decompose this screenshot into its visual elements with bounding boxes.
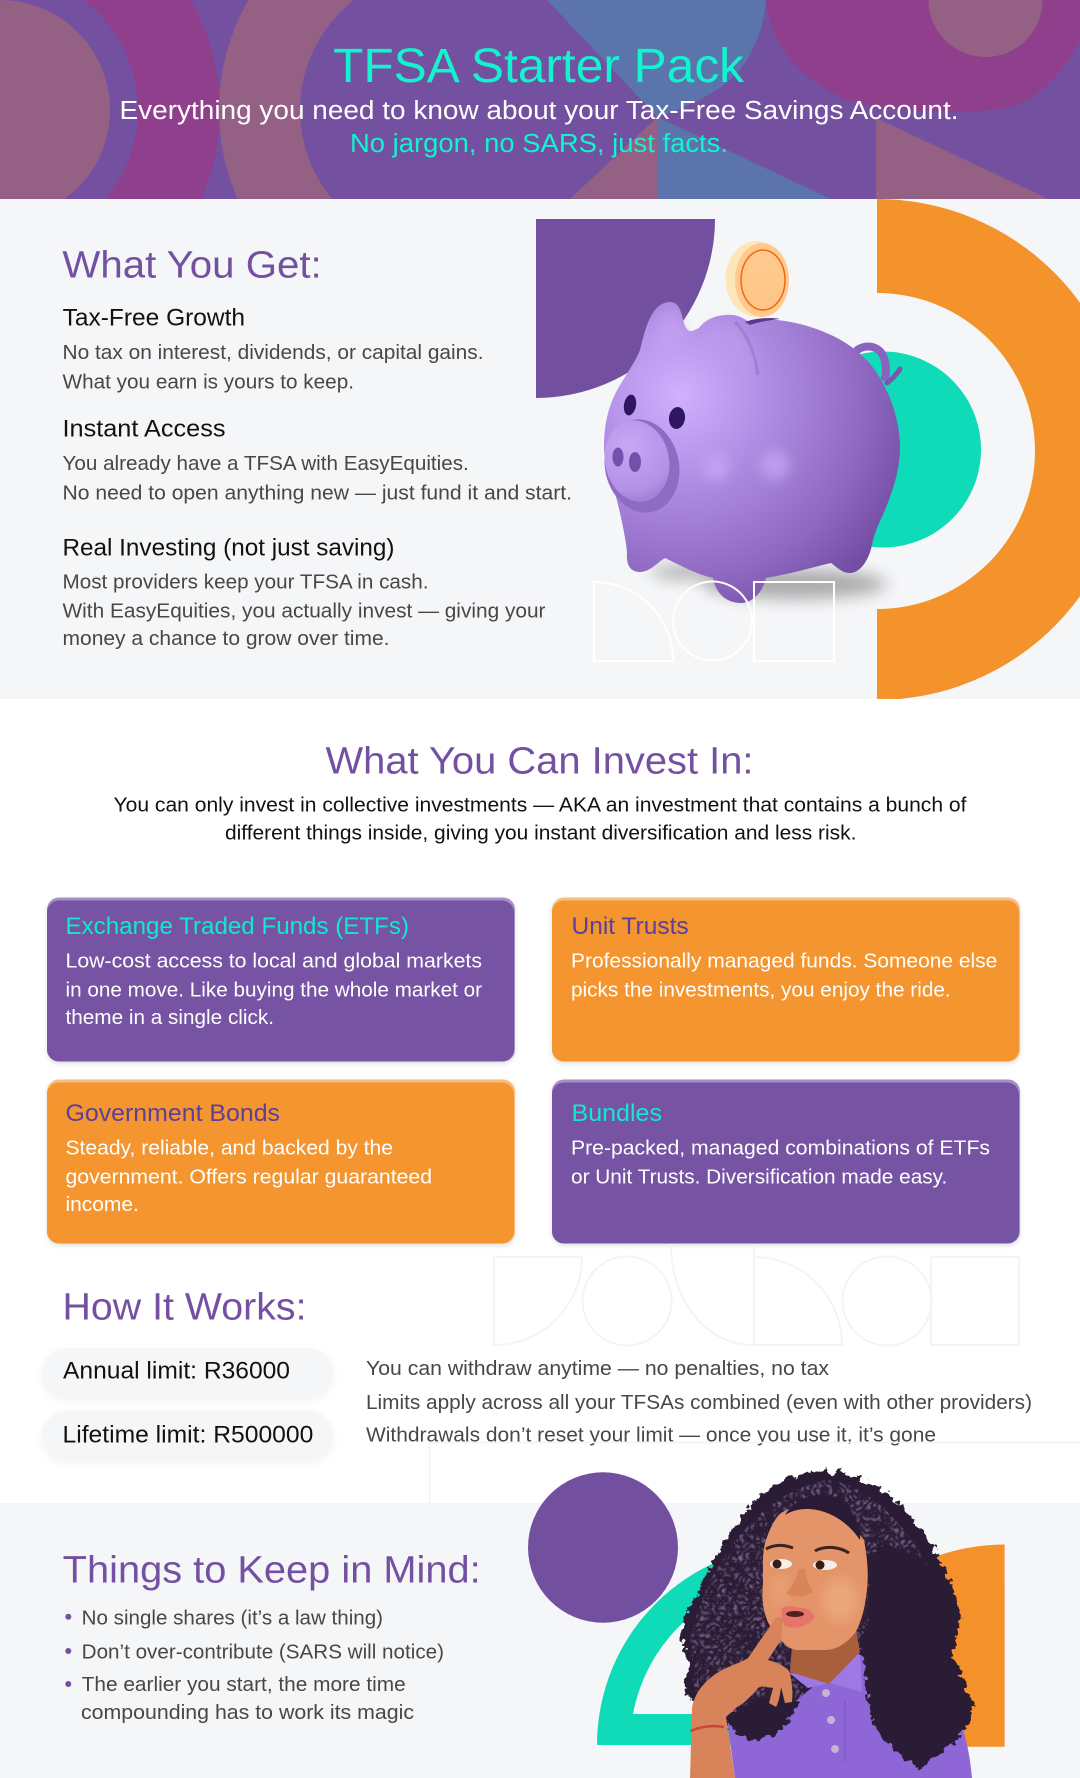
intro text: different things inside, giving you instant diversification and less risk. — [225, 821, 856, 844]
shirt — [726, 1648, 972, 1778]
pill: lifetime limit — [42, 1411, 333, 1460]
card: government bonds: Government Bonds — [66, 1100, 280, 1127]
decorative orange half ring — [877, 199, 1080, 700]
card: unit trusts: Professionally managed funds. Someone else — [571, 949, 997, 972]
benefit: real investing: With EasyEquities, you actually invest — giving your — [62, 599, 546, 622]
arm and hand — [690, 1617, 792, 1778]
illustration: thinking woman — [681, 1472, 973, 1778]
card: unit trusts: picks the investments, you enjoy the ride. — [571, 979, 951, 1002]
benefit: tax-free growth — [62, 305, 484, 393]
pill: lifetime limit: Lifetime limit: R500000 — [62, 1421, 313, 1448]
bullet list: compounding has to work its magic — [81, 1701, 414, 1724]
rules list: Limits apply across all your TFSAs combined (even with other providers) — [366, 1391, 1032, 1414]
card: exchange traded funds: theme in a single click. — [66, 1006, 274, 1029]
pill: annual limit: Annual limit: R36000 — [63, 1357, 290, 1384]
heading: How It Works: — [62, 1286, 306, 1328]
card: government bonds: Steady, reliable, and backed by the — [66, 1136, 393, 1159]
benefit: instant access — [62, 416, 572, 504]
card: government bonds: government. Offers regular guaranteed — [66, 1165, 432, 1188]
decorative quarter circle — [536, 219, 715, 398]
hair back — [681, 1472, 973, 1753]
benefit: real investing: money a chance to grow over time. — [62, 627, 390, 650]
intro text — [114, 794, 967, 844]
bullet list: The earlier you start, the more time — [82, 1673, 406, 1696]
benefit: tax-free growth: No tax on interest, dividends, or capital gains. — [62, 341, 484, 364]
card: bundles: Bundles — [572, 1100, 662, 1127]
card: unit trusts: Unit Trusts — [572, 913, 689, 940]
title: TFSA Starter Pack — [333, 40, 745, 93]
card: bundles — [552, 1080, 1020, 1244]
bullet list: No single shares (it’s a law thing) — [82, 1606, 383, 1629]
panel: header banner — [0, 0, 1080, 199]
rules list: Withdrawals don’t reset your limit — once you use it, it’s gone — [366, 1424, 936, 1447]
decorative orange quarter circle — [802, 1544, 1005, 1747]
card: exchange traded funds: Low-cost access to local and global markets — [66, 949, 482, 972]
card: government bonds — [47, 1080, 515, 1244]
card: government bonds: income. — [66, 1193, 139, 1216]
bullet list — [65, 1606, 444, 1724]
neck — [790, 1625, 860, 1684]
benefit: real investing: Most providers keep your TFSA in cash. — [62, 570, 429, 593]
benefit: real investing — [62, 535, 546, 650]
intro text: You can only invest in collective investments — AKA an investment that contains a bunch of — [114, 794, 967, 817]
heading: What You Can Invest In: — [326, 740, 754, 782]
face — [762, 1505, 868, 1650]
heading: What You Get: — [62, 244, 322, 286]
decorative faint outlined shapes — [494, 1244, 1019, 1346]
icon: piggy bank with coin — [596, 241, 900, 603]
pill: annual limit — [42, 1348, 333, 1397]
card: exchange traded funds: Exchange Traded Funds (ETFs) — [66, 913, 409, 940]
heading: Things to Keep in Mind: — [63, 1549, 481, 1591]
hair front locks — [722, 1547, 973, 1768]
bullet list: Don’t over-contribute (SARS will notice) — [82, 1640, 444, 1663]
card: exchange traded funds — [47, 898, 515, 1062]
panel: things to keep in mind — [0, 1442, 1080, 1778]
panel: what you can invest in — [47, 740, 1020, 1244]
card: unit trusts — [552, 898, 1020, 1062]
rules list — [366, 1357, 1032, 1447]
benefit: tax-free growth: Tax-Free Growth — [63, 305, 245, 332]
card: exchange traded funds: in one move. Like buying the whole market or — [66, 979, 482, 1002]
panel: what you get — [0, 199, 1080, 700]
decorative purple circle — [528, 1472, 678, 1623]
benefit: instant access: No need to open anything new — just fund it and start. — [62, 481, 572, 504]
subtitle: Everything you need to know about your Tax-Free Savings Account. — [120, 97, 958, 125]
benefit: real investing: Real Investing (not just saving) — [62, 535, 394, 562]
decorative teal arc — [597, 1564, 730, 1745]
card: bundles: Pre-packed, managed combinations of ETFs — [571, 1136, 990, 1159]
benefit: tax-free growth: What you earn is yours to keep. — [62, 370, 354, 393]
benefit: instant access: You already have a TFSA with EasyEquities. — [62, 452, 469, 475]
rules list: You can withdraw anytime — no penalties, no tax — [366, 1357, 830, 1380]
tagline: No jargon, no SARS, just facts. — [350, 130, 728, 158]
panel: how it works — [42, 1286, 1032, 1460]
decorative teal circle — [785, 352, 981, 548]
decorative outlined shapes — [594, 582, 834, 661]
card: bundles: or Unit Trusts. Diversification made easy. — [571, 1165, 947, 1188]
benefit: instant access: Instant Access — [62, 416, 226, 443]
